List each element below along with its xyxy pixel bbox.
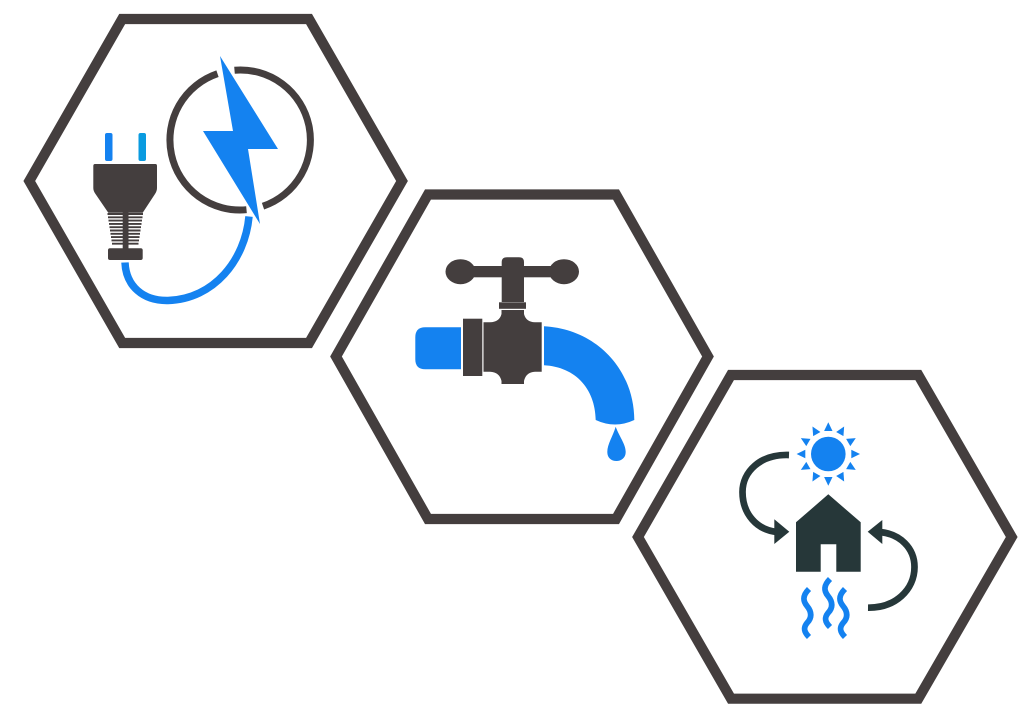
icon: house [796,494,861,572]
hexagon frame: heating [638,375,1012,699]
icon: faucet body [463,310,542,384]
icon: inlet pipe [415,327,461,369]
icon: lightning bolt [203,56,278,224]
icon: water drop [607,427,626,461]
hexagon frame: water [336,194,708,519]
icon: faucet spout [544,326,634,424]
icon: sun [797,422,860,486]
icon: plug [93,133,157,260]
panel: water [336,194,708,519]
icon: heat waves [804,579,847,637]
panel: electricity [29,19,402,343]
icon: arrow from sun to house [742,455,789,544]
hexagon frame: electricity [29,19,402,343]
icon: arrow from heat to house [868,520,914,608]
panel: heating [638,375,1012,699]
icon: faucet handle [446,257,579,309]
icon: circle around the bolt [170,70,310,210]
icon: power cord [125,216,249,301]
